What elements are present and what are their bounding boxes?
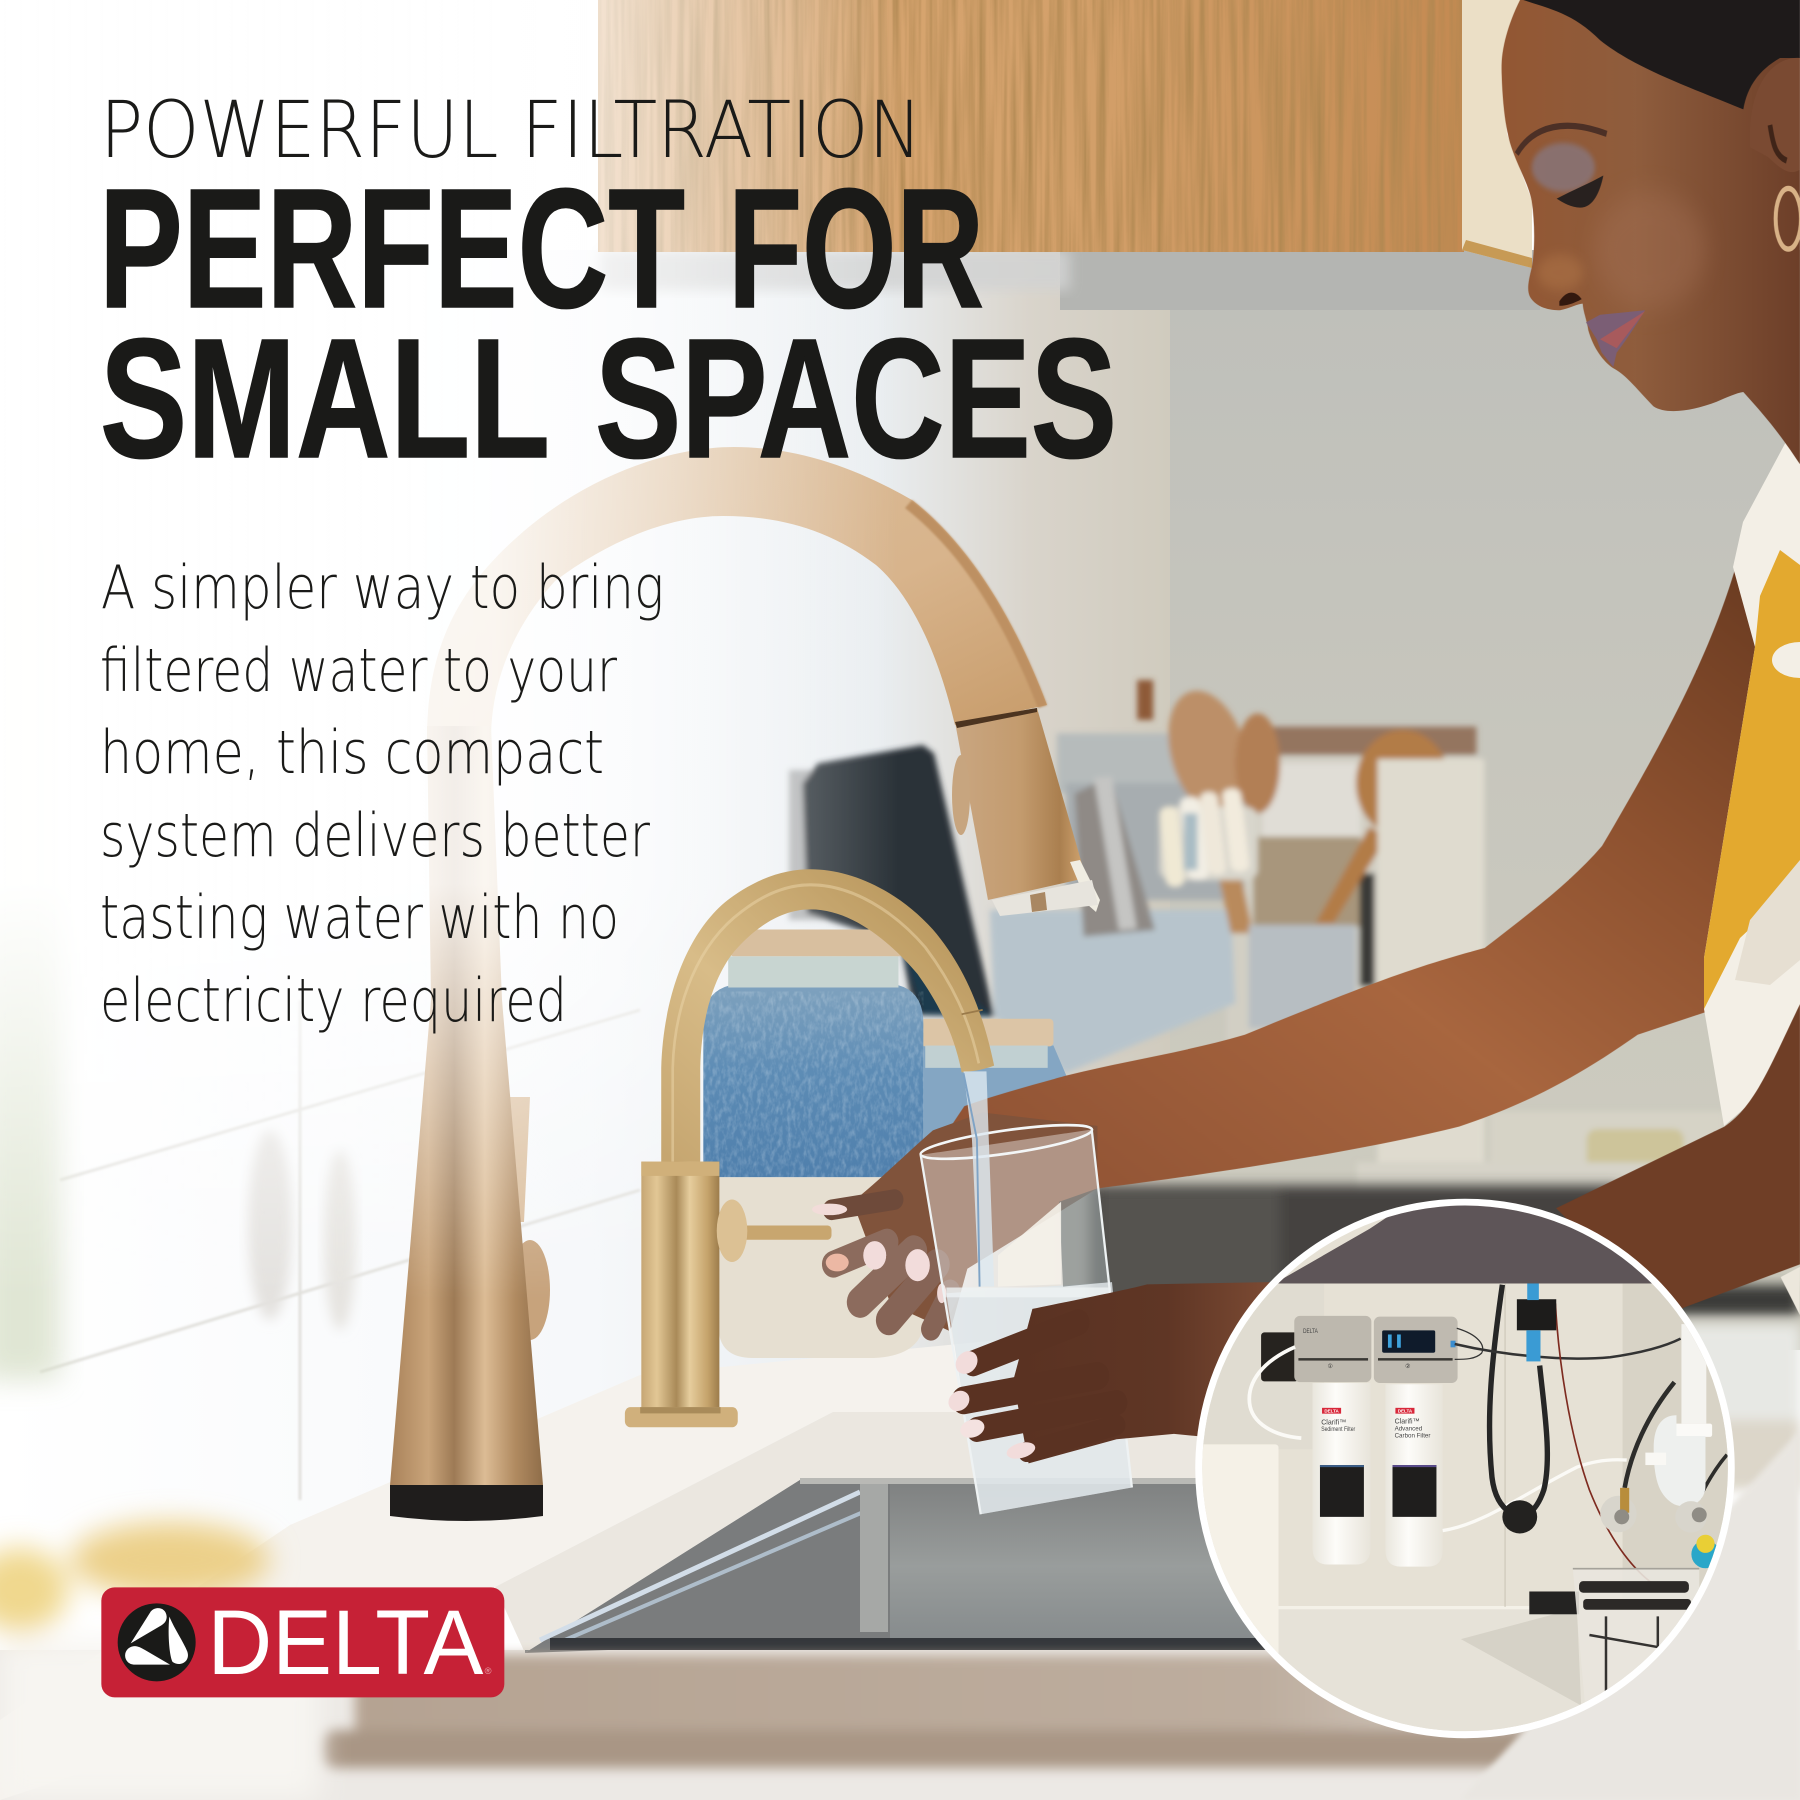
filter cartridge: sediment	[1312, 1383, 1371, 1565]
filter head units: ②	[1405, 1363, 1411, 1370]
photo: cooktop behind arms	[1090, 1185, 1800, 1490]
filter cartridge: carbon: DELTA	[1398, 1408, 1413, 1413]
photo: woman's shirt	[1704, 430, 1800, 1200]
photo: ceramic jars	[703, 929, 1071, 1358]
photo: woman's reaching arm	[934, 570, 1765, 1213]
heading: main title: SMALL	[100, 304, 550, 494]
body text: filtered water to your	[100, 636, 617, 706]
photo: kitchen backdrop	[0, 250, 1800, 1550]
photo: white fade overlay	[0, 0, 900, 1300]
filter head units	[1261, 1316, 1458, 1383]
photo: countertop and sink	[0, 1340, 1800, 1800]
body text: electricity required	[100, 966, 567, 1036]
photo: blurred appliance and utensils	[789, 680, 1724, 1208]
filter cartridge: sediment: DELTA	[1324, 1408, 1340, 1413]
inset circle ring	[1199, 1202, 1731, 1734]
photo: folded towel	[322, 1655, 1645, 1768]
filter cartridge: sediment: Clarifi™	[1321, 1419, 1346, 1426]
filter cartridge: carbon	[1385, 1384, 1443, 1567]
filter cartridge: carbon: Clarifi™	[1395, 1419, 1420, 1426]
icon: small water-filter faucet	[625, 869, 994, 1427]
heading: main title: SPACES	[595, 304, 1117, 494]
logo: Delta: DELTA	[207, 1592, 484, 1694]
filter head units: ①	[1328, 1363, 1333, 1370]
logo: Delta: ®	[485, 1666, 492, 1676]
filter cartridge: carbon: Carbon Filter	[1395, 1432, 1430, 1439]
heading: main title: FOR	[728, 154, 984, 344]
inset: under-sink filter system	[1199, 1200, 1739, 1739]
heading: main title: PERFECT	[99, 154, 685, 344]
body text: A simpler way to bring	[101, 553, 664, 623]
tubes and wiring	[1249, 1285, 1727, 1584]
inset photo contents	[1200, 1200, 1739, 1739]
heading: main title	[99, 154, 1117, 494]
icon: Delta triangle mark	[118, 1603, 196, 1681]
body text: tasting water with no	[100, 883, 619, 953]
filter cartridge: carbon: Advanced	[1395, 1426, 1423, 1433]
photo: drinking glass with water	[919, 1071, 1132, 1514]
photo: hand holding glass	[946, 1282, 1270, 1463]
icon: large kitchen faucet	[390, 447, 1100, 1521]
photo: second arm behind inset	[1556, 1004, 1800, 1315]
logo: Delta	[101, 1587, 504, 1697]
body text: system delivers better	[100, 801, 650, 871]
heading: kicker: POWERFUL FILTRATION	[100, 86, 922, 176]
photo: blurred lemons	[0, 1522, 320, 1800]
filter head units: DELTA	[1303, 1328, 1319, 1335]
photo: counter foreground right	[1460, 1430, 1800, 1800]
photo: left window tint	[0, 520, 60, 1380]
body text	[100, 553, 664, 1036]
photo: hand on faucet lever	[812, 1113, 1097, 1331]
photo: wood cabinet	[598, 0, 1532, 268]
drain trap	[1645, 1324, 1712, 1506]
body text: home, this compact	[100, 718, 604, 788]
photo: woman's face	[1501, 0, 1800, 464]
filter cartridge: sediment: Sediment Filter	[1321, 1426, 1355, 1433]
